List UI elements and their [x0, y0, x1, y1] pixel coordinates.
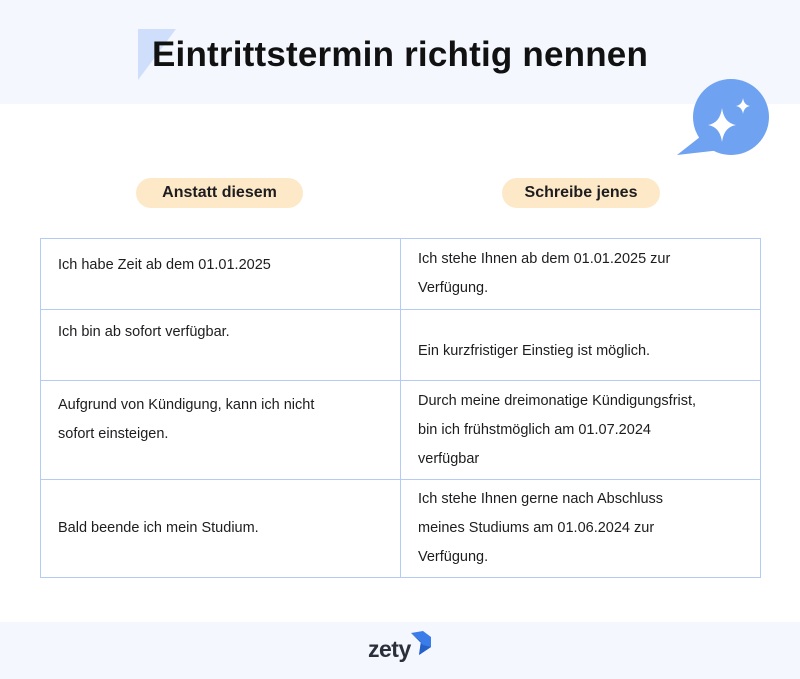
comparison table: Ich stehe Ihnen gerne nach Abschluss: [418, 491, 663, 507]
comparison table: [40, 238, 761, 578]
comparison table: Aufgrund von Kündigung, kann ich nicht: [58, 397, 314, 413]
pill: Schreibe jenes: Schreibe jenes: [525, 184, 637, 201]
comparison table: Verfügung.: [418, 280, 488, 296]
logo: zety: [368, 631, 431, 662]
comparison table: verfügbar: [418, 450, 479, 466]
comparison table: Ein kurzfristiger Einstieg ist möglich.: [418, 342, 650, 358]
pill: Anstatt diesem: [136, 178, 303, 208]
icon: speech bubble with sparkles: [677, 79, 769, 155]
footer band: [0, 622, 800, 679]
logo: zety: zety: [368, 636, 411, 662]
comparison table: Ich bin ab sofort verfügbar.: [58, 324, 230, 340]
comparison table: sofort einsteigen.: [58, 426, 168, 442]
comparison table: Verfügung.: [418, 549, 488, 565]
comparison table: Ich stehe Ihnen ab dem 01.01.2025 zur: [418, 251, 670, 267]
comparison table: bin ich frühstmöglich am 01.07.2024: [418, 422, 651, 438]
title: Eintrittstermin richtig nennen: [152, 35, 648, 74]
header band: [0, 0, 800, 104]
title accent triangle: [138, 29, 176, 80]
comparison table: Durch meine dreimonatige Kündigungsfrist,: [418, 392, 696, 408]
comparison table: Bald beende ich mein Studium.: [58, 520, 259, 536]
pill: Anstatt diesem: Anstatt diesem: [162, 184, 277, 201]
pill: Schreibe jenes: [502, 178, 660, 208]
comparison table: meines Studiums am 01.06.2024 zur: [418, 520, 654, 536]
comparison table: Ich habe Zeit ab dem 01.01.2025: [58, 257, 271, 273]
